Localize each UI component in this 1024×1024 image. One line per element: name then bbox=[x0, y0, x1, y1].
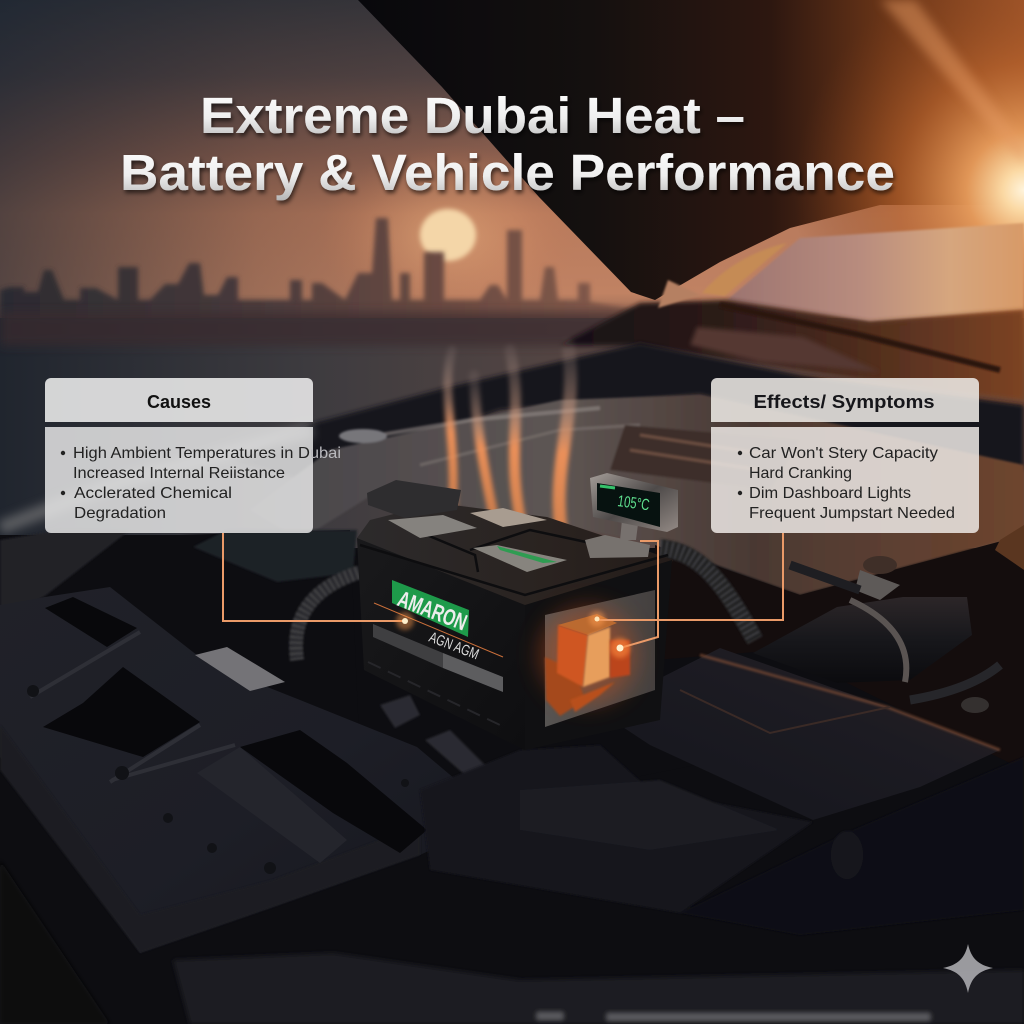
causes list: High Ambient Temperatures in D ubai bbox=[73, 445, 341, 462]
causes list bbox=[45, 427, 341, 533]
upper-left plastic box bbox=[193, 530, 357, 582]
connector lines: effects bbox=[589, 533, 783, 658]
left plastic engine cover bbox=[0, 587, 500, 953]
corrugated hose right of battery bbox=[660, 548, 755, 640]
panel: causes bbox=[45, 378, 341, 533]
icon: sparkle watermark bbox=[943, 944, 993, 993]
sun flare at right bbox=[794, 0, 1024, 420]
grey spec strip bbox=[373, 624, 443, 668]
brand label: AMARON bbox=[394, 585, 471, 635]
cover vent openings bbox=[43, 597, 427, 853]
battery cutaway window bbox=[540, 590, 655, 727]
cover brackets and tray bbox=[27, 632, 409, 874]
temperature gauge display: 105°C bbox=[616, 493, 650, 514]
battery lid bbox=[357, 503, 673, 607]
title: Battery & Vehicle Performance bbox=[120, 144, 895, 201]
temperature gauge display bbox=[590, 473, 678, 540]
background: city skyline bbox=[0, 218, 640, 325]
effects header: Effects/ Symptoms bbox=[754, 392, 934, 412]
windshield bbox=[727, 223, 1024, 322]
battery lid edge lines bbox=[360, 528, 668, 595]
title bbox=[120, 87, 895, 201]
causes header bbox=[45, 378, 313, 422]
battery tie-down clips bbox=[380, 695, 490, 775]
battery bbox=[357, 480, 673, 750]
right black air box cover bbox=[597, 648, 1000, 820]
battery terminals bbox=[585, 535, 650, 558]
lit car body curve at left bbox=[0, 430, 312, 528]
title: Extreme Dubai Heat – bbox=[200, 87, 745, 144]
connector lines: causes bbox=[223, 533, 503, 657]
a-pillar glow and peach reflection bbox=[658, 243, 787, 308]
battery vent cap bbox=[367, 480, 461, 518]
causes header: Causes bbox=[147, 392, 211, 412]
battery right face bbox=[525, 560, 672, 750]
panel: effects / symptoms bbox=[711, 378, 979, 533]
engine bay right dark area bbox=[655, 535, 1024, 770]
lower dark body panels bbox=[420, 745, 1024, 935]
engine bay dark base bbox=[0, 530, 1024, 1024]
effects list bbox=[711, 427, 979, 533]
battery top labels bbox=[388, 508, 567, 572]
effects list: Hard Cranking bbox=[749, 465, 852, 482]
car hood underside bbox=[358, 0, 1024, 300]
background: dusk sky bbox=[0, 0, 1024, 345]
effects list: Frequent Jumpstart Needed bbox=[749, 505, 955, 522]
lower bumper strip bbox=[0, 860, 1024, 1024]
background: water and haze below the skyline bbox=[0, 312, 1024, 548]
model text: AGN AGM bbox=[427, 629, 481, 663]
dark rim of engine bay bbox=[230, 343, 1024, 480]
brand label bbox=[392, 580, 471, 637]
effects list: Dim Dashboard Lights bbox=[749, 485, 911, 502]
cowl below windshield bbox=[560, 300, 1024, 404]
battery bottom ribs bbox=[368, 662, 500, 725]
upper-left vents bbox=[0, 530, 130, 620]
grey spec strip right bbox=[443, 653, 503, 692]
corrugated hose near battery bbox=[296, 572, 360, 660]
battery left face bbox=[357, 538, 525, 750]
heat wisps rising from battery bbox=[448, 345, 571, 560]
effects header bbox=[711, 378, 979, 422]
causes list: Degradation bbox=[74, 505, 166, 522]
black intake tube bbox=[753, 525, 1024, 713]
causes list: Increased Internal Reiistance bbox=[73, 465, 285, 482]
engine top cover bbox=[250, 395, 1024, 595]
effects list: Car Won't Stery Capacity bbox=[749, 445, 938, 462]
cover metal plate bbox=[195, 647, 285, 691]
causes list: Acclerated Chemical bbox=[74, 485, 232, 502]
